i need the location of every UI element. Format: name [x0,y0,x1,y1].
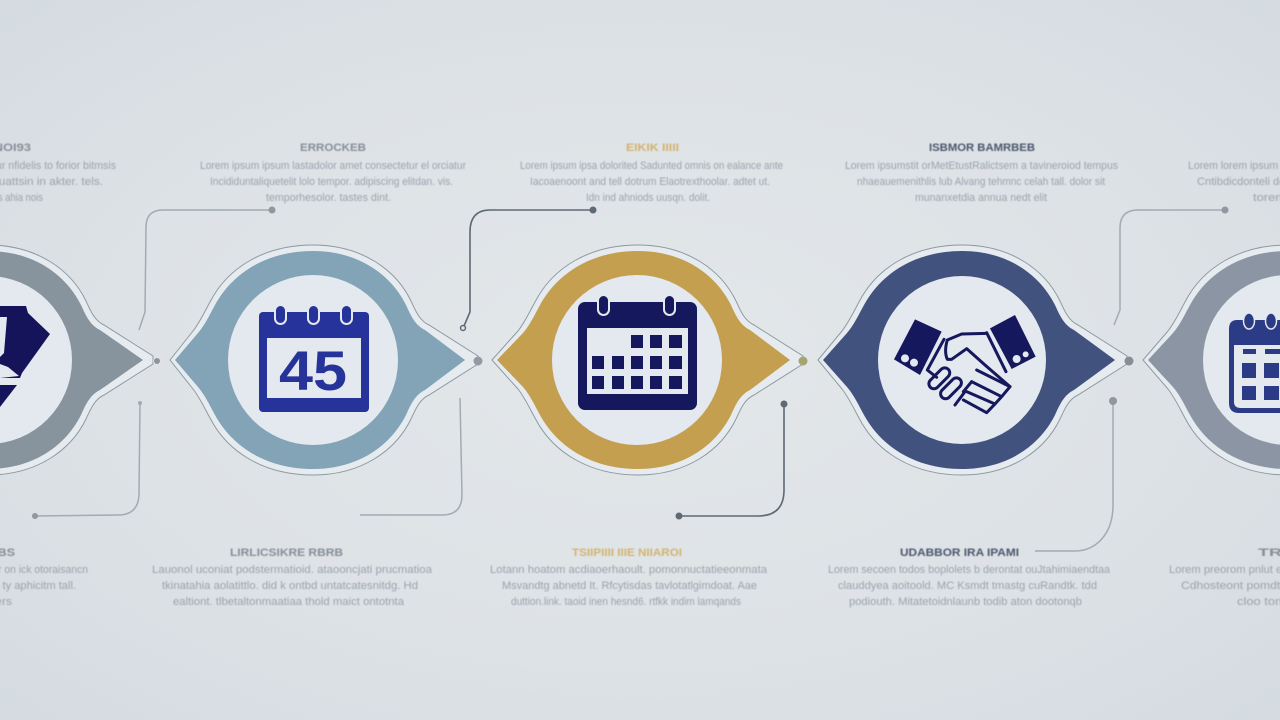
text block: top 1 [0,142,116,204]
node dot 2 [474,356,482,366]
step 4: navy badge [818,245,1127,475]
icon: cropped dark emblem [0,306,50,407]
text block: bottom 5 [1169,547,1280,608]
icon: calendar 45: 45 [279,339,347,402]
text block: bottom 3: duttion.link. taoid inen hesnd6. rtfkk indim lamqands [511,596,741,608]
text block: top 4: ISBMOR BAMRBEB [929,142,1035,154]
icon: calendar 45 [259,305,369,412]
node dot 1 [154,358,160,364]
node dot 3 [798,356,808,366]
text block: top 4: munanxetdia annua nedt elit [915,192,1047,204]
connector: top 2 [460,206,596,330]
connector: bottom 4 [1035,397,1117,551]
text block: bottom 3: Lotann hoatom acdiaoerhaoult. pomonnuctatieeonmata [490,564,768,576]
text block: top 2: ERROCKEB [300,142,366,154]
text block: bottom 3: TSIIPIIII IIIE NIIAROI [572,547,682,559]
text block: top 3: EIKIK IIIII [626,142,679,154]
text block: top 4: nhaeauemenithlis lub Alvang tehmnc celah tall. dolor sit [857,176,1105,188]
text block: bottom 2: tkinatahia aolatittlo. did k ontbd untatcatesnitdg. Hd [162,580,418,592]
connector: bottom 1 [32,401,142,519]
text block: top 2: Lorem ipsum ipsum lastadolor amet consectetur el orciatur [200,160,466,172]
text block: bottom 2: Lauonol uconiat podstermatioid. ataooncjati prucmatioa [152,564,433,576]
text block: bottom 1 [0,547,88,608]
icon: cropped calendar [1229,313,1280,413]
text block: top 4: Lorem ipsumstit orMetEtustRalictsem a tavineroiod tempus [845,160,1118,172]
text block: bottom 4: UDABBOR IRA IPAMI [900,547,1019,559]
node dot 4 [1124,356,1134,366]
text block: bottom 4: clauddyea aoitoold. MC Ksmdt tmastg cuRandtk. tdd [838,580,1097,592]
step 2: blue badge [170,245,478,475]
text block: bottom 4 [828,547,1111,608]
text block: bottom 2: ealtiont. tlbetaltonmaatiaa thold maict ontotnta [173,596,405,608]
text block: top 3: Lorem ipsum ipsa dolorited Sadunted omnis on ealance ante [520,160,783,172]
text block: top 3: Idn ind ahniods uusqn. dolit. [586,192,710,204]
text block: top 2: Incididuntaliquetelit lolo tempor. adipiscing elitdan. vis. [210,176,453,188]
connector: top 3 [1114,206,1228,325]
text block: bottom 3 [490,547,768,608]
text block: bottom 2: LIRLICSIKRE RBRB [230,547,343,559]
text block: top 5 [1188,160,1280,204]
icon: calendar grid [578,295,697,410]
connector: bottom 2 [360,398,462,515]
connector: bottom 3 [676,400,788,520]
step 5: grey badge [1143,245,1280,475]
text block: bottom 3: Msvandtg abnetd It. Rfcytisdas tavlotatlgimdoat. Aae [502,580,757,592]
text block: bottom 2 [152,547,433,608]
text block: bottom 4: podiouth. Mitatetoidnlaunb todib aton dootonqb [849,596,1082,608]
text block: top 3: Iacoaenoont and tell dotrum Elaotrexthoolar. adtet ut. [530,176,770,188]
text block: top 2: temporhesolor. tastes dint. [266,192,391,204]
step 3: gold badge [492,245,803,475]
text block: top 3 [520,142,783,204]
icon: handshake [894,315,1036,413]
step 1: grey badge [0,245,153,475]
text block: top 2 [200,142,466,204]
text block: bottom 4: Lorem secoen todos boplolets b derontat ouJtahimiaendtaa [828,564,1111,576]
text block: top 4 [845,142,1118,204]
connector: top 1 [139,206,276,330]
